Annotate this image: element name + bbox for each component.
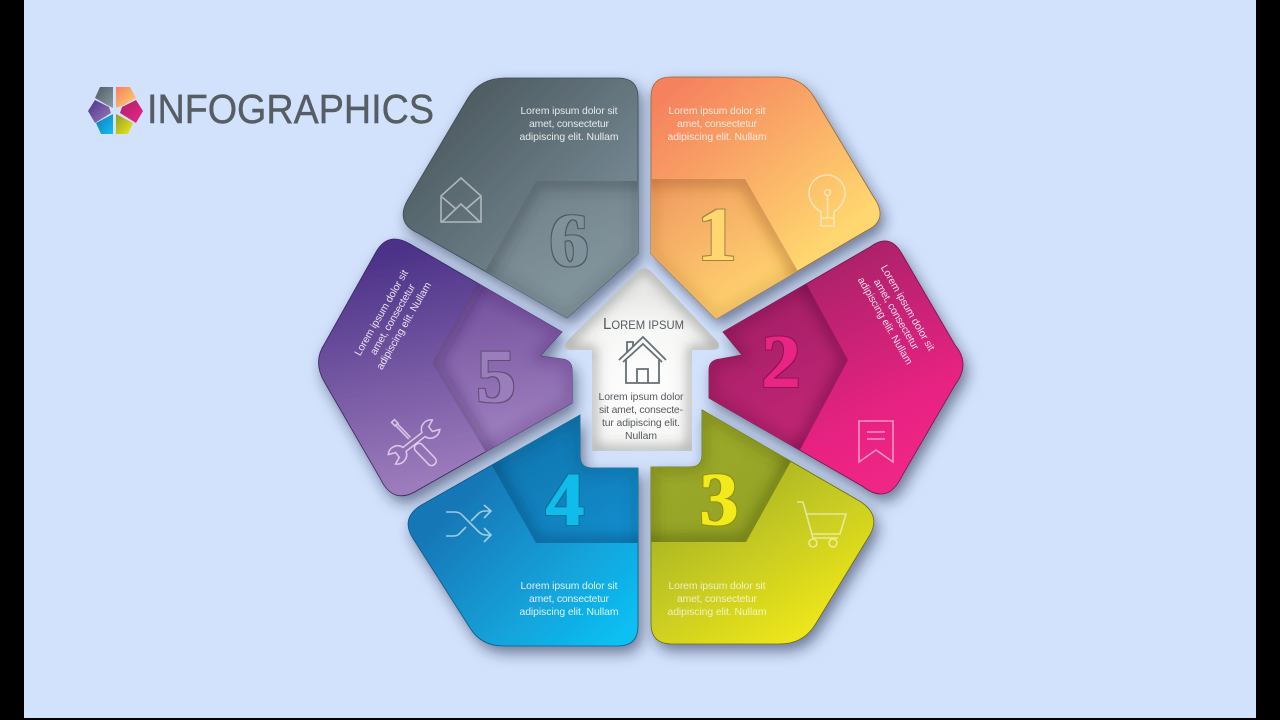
text 4 bbox=[520, 581, 618, 618]
center body text: Nullam bbox=[625, 431, 657, 442]
text 6: adipiscing elit. Nullam bbox=[520, 132, 618, 143]
text 1: amet, consectetur bbox=[677, 119, 758, 130]
panel: segment 5 purple bbox=[318, 239, 590, 496]
icon: shopping cart bbox=[797, 502, 846, 547]
number 2: 2 bbox=[762, 320, 800, 404]
text 4: amet, consectetur bbox=[529, 594, 610, 605]
panel: segment 2 magenta bbox=[700, 241, 963, 494]
text 4: Lorem ipsum dolor sit bbox=[520, 581, 618, 592]
text 6: Lorem ipsum dolor sit bbox=[520, 106, 618, 117]
text 5 bbox=[353, 268, 434, 372]
logo mark bbox=[88, 87, 143, 134]
text 3 bbox=[668, 581, 766, 618]
icon: tools bbox=[386, 418, 442, 467]
number 5: 5 bbox=[477, 335, 515, 419]
text 1: adipiscing elit. Nullam bbox=[668, 132, 766, 143]
number 3: 3 bbox=[700, 458, 738, 542]
icon: envelope bbox=[441, 178, 481, 222]
text 1: Lorem ipsum dolor sit bbox=[668, 106, 766, 117]
title: INFOGRAPHICS bbox=[147, 86, 434, 132]
center heading: LOREM IPSUM bbox=[603, 316, 684, 333]
text 5: adipiscing elit. Nullam bbox=[375, 281, 434, 372]
text 6: amet, consectetur bbox=[529, 119, 610, 130]
text 5: Lorem ipsum dolor sit bbox=[353, 268, 411, 358]
recess 4 bbox=[492, 415, 638, 543]
text 2 bbox=[855, 263, 936, 367]
center arrow panel bbox=[564, 268, 719, 451]
panel: segment 4 blue bbox=[408, 400, 650, 646]
panel: segment 3 olive bbox=[640, 400, 874, 644]
center body text: tur adipiscing elit. bbox=[602, 418, 680, 429]
number 1: 1 bbox=[698, 193, 736, 277]
text 2: Lorem ipsum dolor sit bbox=[878, 263, 936, 353]
recess 2 bbox=[709, 284, 848, 450]
text 3: Lorem ipsum dolor sit bbox=[668, 581, 766, 592]
arrow inner shadow bbox=[564, 268, 719, 451]
icon: house bbox=[619, 337, 666, 383]
text 3: adipiscing elit. Nullam bbox=[668, 607, 766, 618]
center body text: Lorem ipsum dolor bbox=[598, 392, 684, 403]
text 2: amet, consectetur bbox=[871, 277, 921, 353]
panel: segment 1 orange bbox=[640, 77, 880, 340]
text 1 bbox=[668, 106, 766, 143]
recess 1 bbox=[651, 179, 798, 319]
text 4: adipiscing elit. Nullam bbox=[520, 607, 618, 618]
icon: bookmark bbox=[859, 421, 893, 462]
recess 6 bbox=[485, 181, 638, 318]
text 6 bbox=[520, 106, 618, 143]
number 6: 6 bbox=[550, 199, 588, 283]
center body text bbox=[598, 392, 684, 442]
text 5: amet, consectetur bbox=[369, 282, 418, 357]
text 3: amet, consectetur bbox=[677, 594, 758, 605]
recess 5 bbox=[432, 283, 572, 452]
icon: light bulb bbox=[809, 175, 845, 226]
panel: segment 6 grey bbox=[403, 78, 650, 340]
center body text: sit amet, consecte- bbox=[599, 405, 683, 416]
recess 3 bbox=[651, 412, 791, 542]
icon: shuffle arrows bbox=[446, 505, 491, 542]
number 4: 4 bbox=[546, 458, 584, 542]
text 2: adipiscing elit. Nullam bbox=[855, 276, 914, 367]
